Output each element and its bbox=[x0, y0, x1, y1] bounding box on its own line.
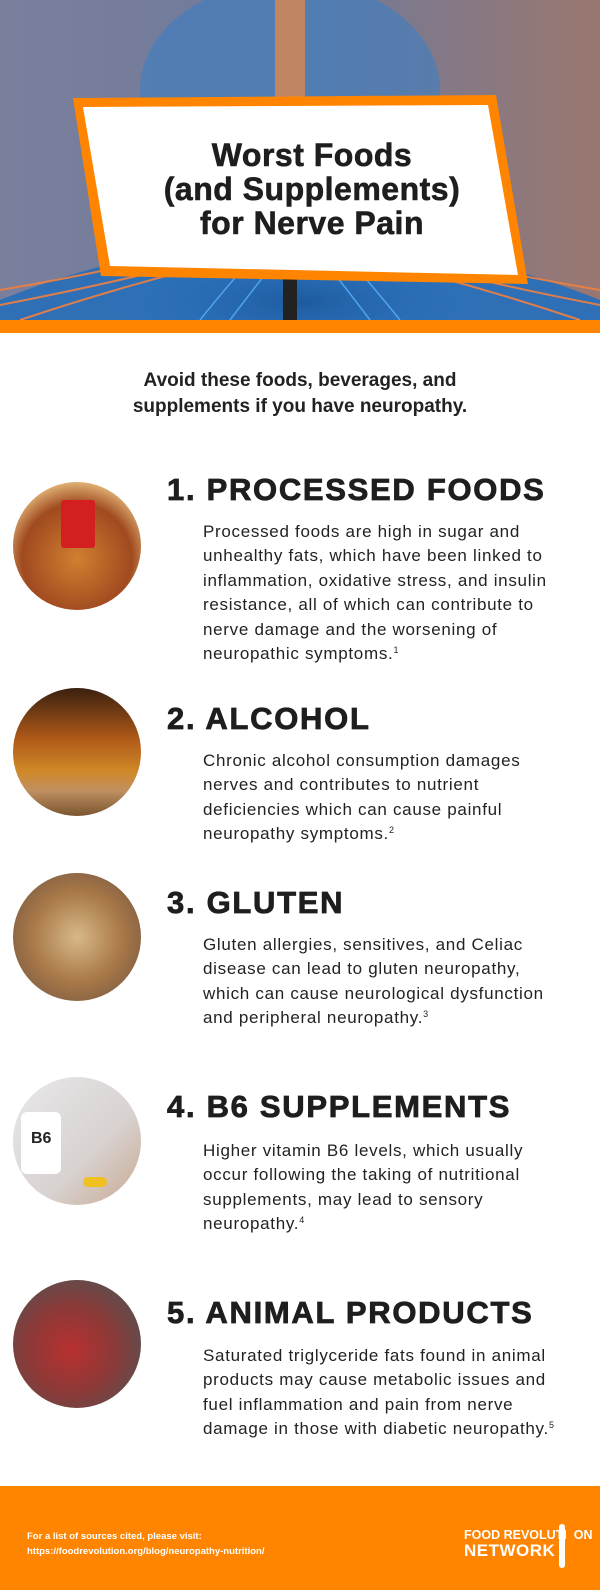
section 2 bbox=[13, 688, 520, 843]
body: Gluten allergies, sensitives, and Celiac disease can lead to gluten neuropathy, which can cause neurological dysfunction and peripheral neuropathy.3 bbox=[203, 935, 544, 1027]
section 5 bbox=[13, 1280, 555, 1438]
header image bbox=[0, 0, 600, 320]
heading: 1. PROCESSED FOODS bbox=[167, 472, 546, 507]
body: Saturated triglyceride fats found in animal products may cause metabolic issues and fuel inflammation and pain from nerve damage in those with diabetic neuropathy.5 bbox=[203, 1346, 555, 1438]
icon: bread bbox=[13, 873, 141, 1001]
icon: meat bbox=[13, 1280, 141, 1408]
title text bbox=[164, 137, 460, 241]
heading: 2. ALCOHOL bbox=[167, 701, 371, 736]
heading: 5. ANIMAL PRODUCTS bbox=[167, 1295, 533, 1330]
logo: FOOD REVOLUTI ON bbox=[464, 1528, 592, 1542]
logo bbox=[464, 1524, 592, 1568]
title box bbox=[73, 95, 528, 284]
icon: processed foods bbox=[13, 482, 141, 610]
heading: 3. GLUTEN bbox=[167, 885, 344, 920]
icon: supplements bbox=[13, 1077, 141, 1205]
sources text: https://foodrevolution.org/blog/neuropathy-nutrition/ bbox=[27, 1546, 264, 1557]
title text: (and Supplements) bbox=[164, 171, 460, 207]
icon: supplements: B6 bbox=[31, 1130, 51, 1147]
sources text: For a list of sources cited, please visit: bbox=[27, 1531, 202, 1542]
section 4 bbox=[13, 1077, 523, 1233]
title text: for Nerve Pain bbox=[200, 205, 424, 241]
intro text: Avoid these foods, beverages, and supplements if you have neuropathy. bbox=[133, 370, 467, 417]
body: Chronic alcohol consumption damages nerves and contributes to nutrient deficiencies which can cause painful neuropathy symptoms.2 bbox=[203, 751, 520, 843]
footer bbox=[0, 1486, 600, 1590]
body: Higher vitamin B6 levels, which usually occur following the taking of nutritional supplements, may lead to sensory neuropathy.4 bbox=[203, 1141, 523, 1233]
body: Processed foods are high in sugar and unhealthy fats, which have been linked to inflammation, oxidative stress, and insulin resistance, all of which can contribute to nerve damage and the worsening of neuropathic symptoms.1 bbox=[203, 522, 547, 663]
section 1 bbox=[13, 472, 547, 663]
heading: 4. B6 SUPPLEMENTS bbox=[167, 1089, 511, 1124]
icon: alcohol bbox=[13, 688, 141, 816]
section 3 bbox=[13, 873, 544, 1027]
logo: NETWORK bbox=[464, 1541, 555, 1560]
title text: Worst Foods bbox=[212, 137, 412, 173]
orange band bbox=[0, 320, 600, 333]
sources text bbox=[27, 1531, 264, 1557]
